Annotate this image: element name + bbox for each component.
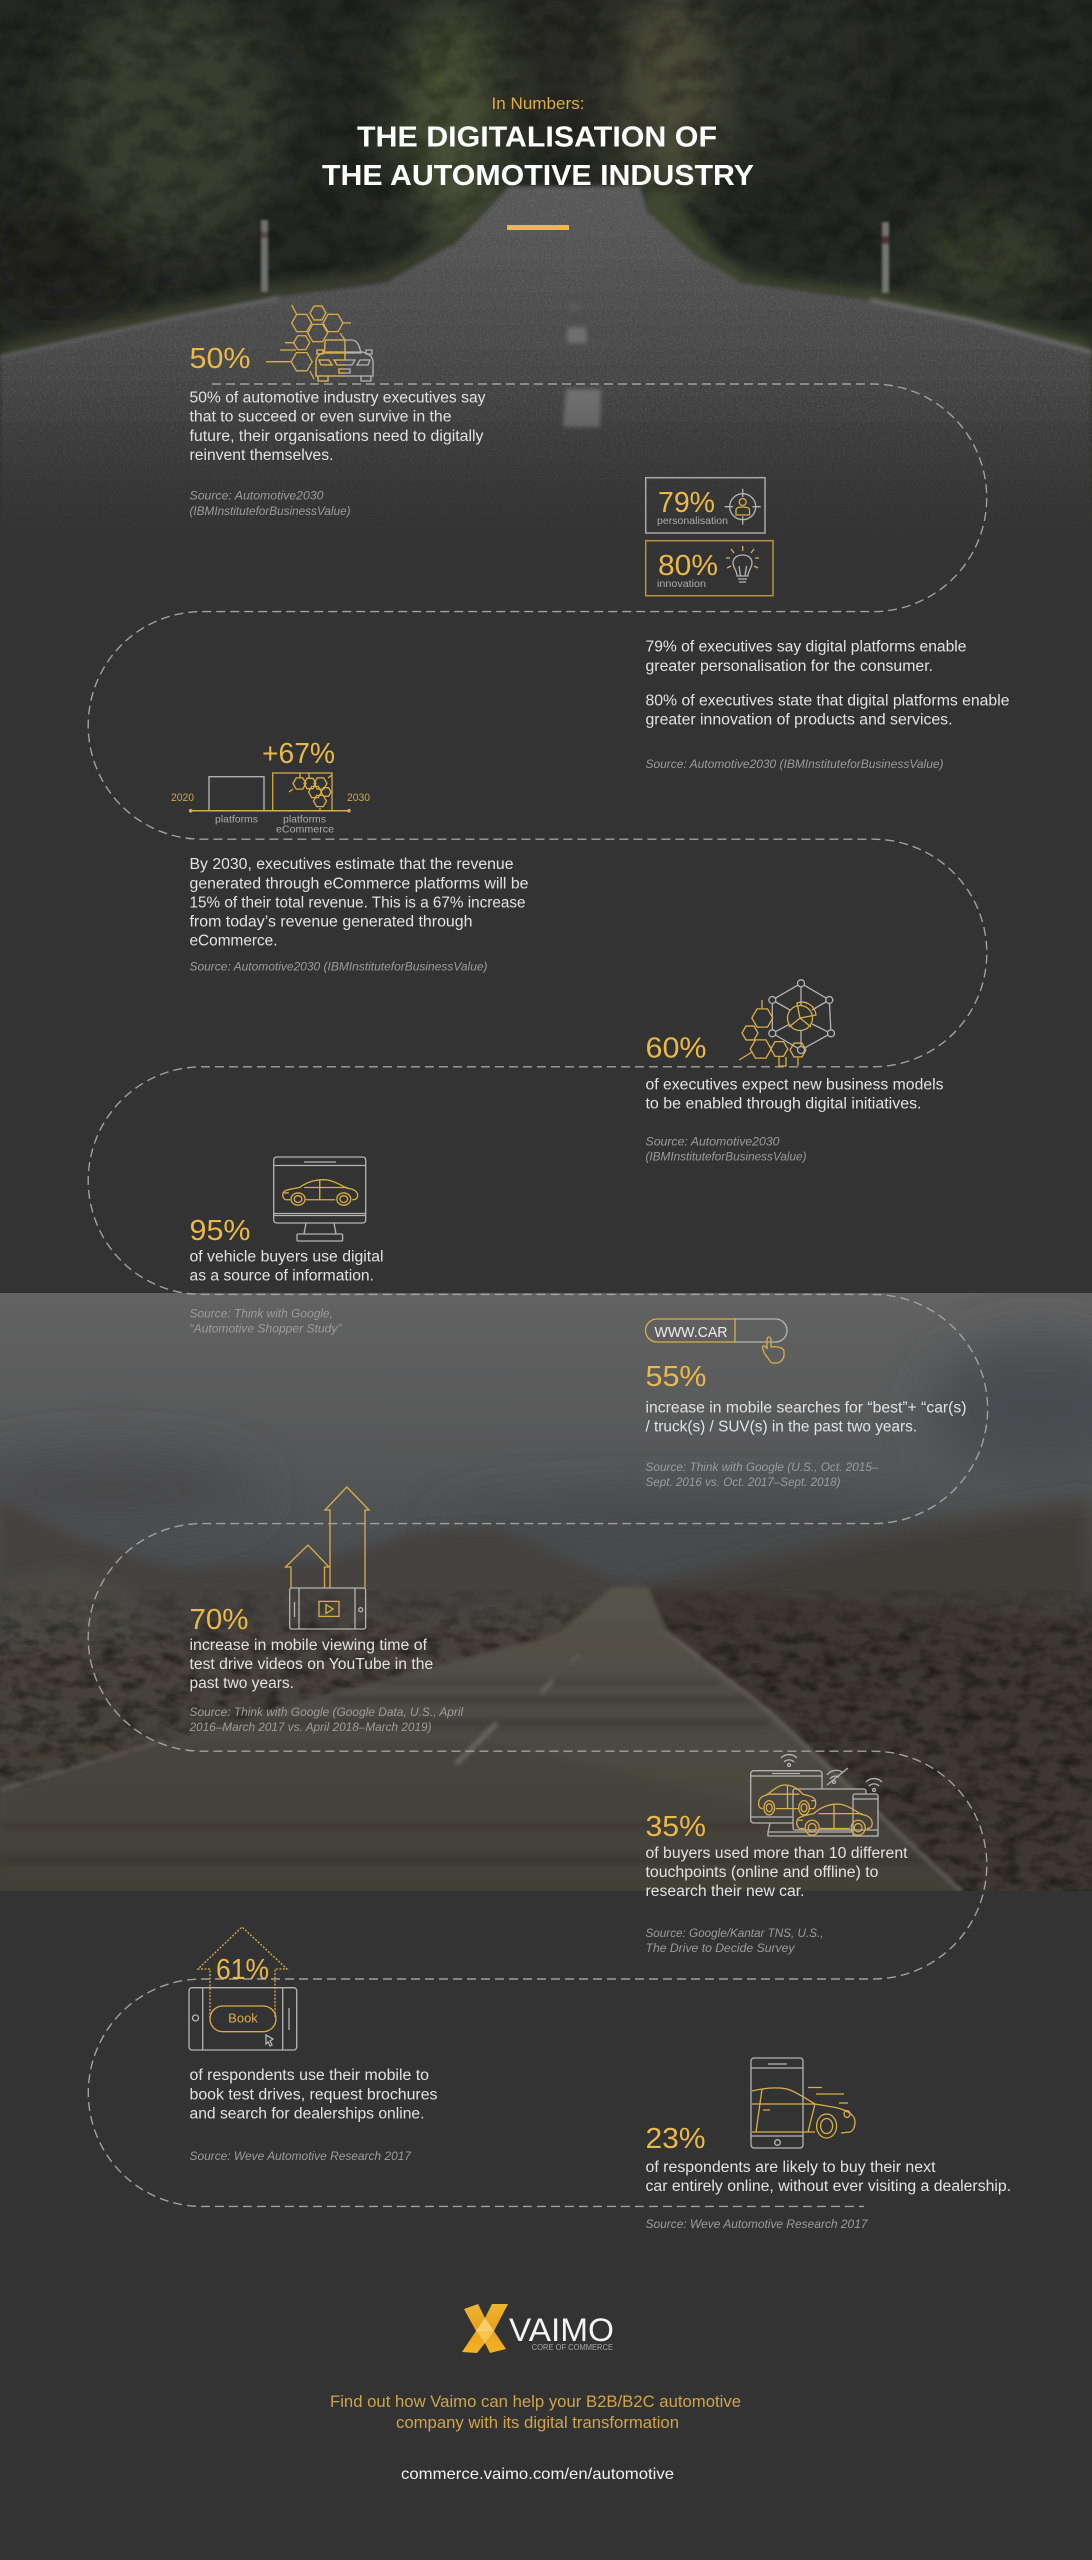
- road: [0, 1586, 950, 1891]
- source: Source: Automotive2030: [646, 1134, 780, 1148]
- background photo: mountain road: [0, 1293, 1092, 1940]
- panel: 60% new business models: [646, 980, 944, 1164]
- source: Source: Think with Google (U.S., Oct. 2015–: [646, 1460, 879, 1474]
- body text: of respondents are likely to buy their next: [646, 2159, 936, 2176]
- source: (IBMInstituteforBusinessValue): [646, 1150, 806, 1164]
- source: Source: Automotive2030 (IBMInstituteforBusinessValue): [190, 960, 488, 974]
- box: 79% personalisation: [646, 478, 765, 533]
- source: The Drive to Decide Survey: [646, 1941, 796, 1955]
- stat: 61%: 61%: [216, 1954, 269, 1986]
- body text: as a source of information.: [190, 1268, 374, 1284]
- roadside posts: [261, 220, 889, 293]
- body text: of respondents use their mobile to: [190, 2067, 429, 2084]
- panel: +67% eCommerce: [171, 738, 528, 974]
- bar chart: 2020 to 2030: 2020: [171, 792, 194, 804]
- call to action: company with its digital transformation: [396, 2414, 679, 2432]
- header: [322, 94, 754, 230]
- footer logo: Vaimo: CORE OF COMMERCE: [532, 2342, 613, 2352]
- source: “Automotive Shopper Study”: [190, 1322, 343, 1336]
- source: [646, 1926, 824, 1955]
- body text: greater innovation of products and services.: [646, 712, 952, 728]
- source: (IBMInstituteforBusinessValue): [190, 504, 350, 518]
- stat: 55%: 55%: [646, 1361, 706, 1393]
- road surface: [0, 184, 1092, 498]
- body text: [190, 856, 528, 950]
- body text: reinvent themselves.: [190, 447, 334, 464]
- stat: 60%: 60%: [646, 1032, 706, 1064]
- body text: and search for dealerships online.: [190, 2106, 424, 2122]
- body text: [190, 390, 486, 464]
- body text: of vehicle buyers use digital: [190, 1248, 384, 1266]
- road markings: [666, 1632, 961, 1891]
- body text: / truck(s) / SUV(s) in the past two years.: [646, 1418, 917, 1436]
- source: [190, 1306, 343, 1336]
- road edge lines: [0, 298, 279, 357]
- body text: greater personalisation for the consumer.: [646, 658, 933, 675]
- body text: test drive videos on YouTube in the: [190, 1656, 433, 1673]
- icon: devices with cars: [751, 1755, 882, 1836]
- panel: 23% buy online: [646, 2058, 1011, 2231]
- body text: book test drives, request brochures: [190, 2086, 438, 2104]
- dashed winding route: [88, 384, 988, 2206]
- bar chart: 2020 to 2030: eCommerce: [276, 824, 334, 836]
- bar chart: 2020 to 2030: platforms: [283, 814, 326, 826]
- website url: commerce.vaimo.com/en/automotive: [401, 2466, 674, 2483]
- icon: network and hexagons: [739, 980, 834, 1066]
- body text: research their new car.: [646, 1883, 804, 1900]
- source: [189, 1705, 464, 1734]
- source: [190, 488, 350, 518]
- body text: of buyers used more than 10 different: [646, 1845, 908, 1862]
- bar chart: 2020 to 2030: 2030: [347, 792, 370, 804]
- panel: 55% mobile searches: [646, 1319, 966, 1489]
- title: THE DIGITALISATION OF: [357, 122, 717, 154]
- stat: 95%: 95%: [190, 1215, 250, 1247]
- body text: generated through eCommerce platforms will be: [190, 876, 528, 892]
- icon: hexagons and car: [266, 305, 373, 381]
- stat: 35%: 35%: [646, 1811, 706, 1843]
- call to action: Find out how Vaimo can help your B2B/B2C automotive: [330, 2393, 741, 2411]
- icon: monitor with car: [274, 1157, 366, 1241]
- body text: [646, 638, 1010, 728]
- body text: of executives expect new business models: [646, 1076, 944, 1094]
- icon: phone with book button and dotted arrow: Book: [228, 2010, 258, 2026]
- call to action: [330, 2393, 741, 2432]
- background photo: forest road: [0, 0, 1092, 504]
- stat: +67%: +67%: [262, 738, 335, 770]
- body text: future, their organisations need to digitally: [190, 428, 484, 445]
- body text: [646, 1076, 944, 1112]
- accent bar: [507, 225, 569, 230]
- icon: rising arrows and phone: [286, 1487, 369, 1629]
- icon: search bar with hand: WWW.CAR: [654, 1324, 728, 1341]
- source: [646, 1460, 879, 1489]
- body text: [190, 1248, 384, 1284]
- footer logo: Vaimo: VAIMO: [509, 2312, 614, 2348]
- body text: 79% of executives say digital platforms enable: [646, 638, 966, 656]
- panel: 79% and 80%: [646, 478, 1010, 771]
- title: THE AUTOMOTIVE INDUSTRY: [322, 160, 754, 192]
- body text: car entirely online, without ever visiting a dealership.: [646, 2178, 1011, 2195]
- roadside verges: [0, 214, 476, 354]
- body text: [646, 2159, 1011, 2195]
- panel: 70% mobile viewing: [189, 1487, 464, 1734]
- source: Source: Automotive2030 (IBMInstituteforBusinessValue): [646, 757, 944, 771]
- bar chart: 2020 to 2030: [171, 773, 370, 836]
- body text: 50% of automotive industry executives say: [190, 390, 486, 406]
- icon: phone with book button and dotted arrow: [189, 1927, 297, 2050]
- icon: phone with car: [751, 2058, 855, 2148]
- icon: target person: [725, 489, 761, 525]
- body text: past two years.: [190, 1675, 294, 1692]
- source: Source: Weve Automotive Research 2017: [646, 2217, 869, 2231]
- box: 80% innovation: innovation: [657, 578, 706, 590]
- body text: that to succeed or even survive in the: [190, 408, 452, 426]
- icon: Vaimo X mark: [462, 2304, 508, 2353]
- source: Sept. 2016 vs. Oct. 2017–Sept. 2018): [646, 1475, 840, 1489]
- body text: [190, 1637, 433, 1692]
- body text: [646, 1400, 966, 1436]
- body text: touchpoints (online and offline) to: [646, 1864, 878, 1881]
- body text: to be enabled through digital initiatives.: [646, 1096, 922, 1112]
- stat: 70%: 70%: [190, 1604, 248, 1636]
- distant mountains: [0, 1505, 618, 1624]
- panel: 50% reinvent: [190, 305, 486, 518]
- stat: 50%: 50%: [190, 343, 250, 375]
- body text: increase in mobile searches for “best”+ “car(s): [646, 1400, 966, 1416]
- icon: search bar with hand: [646, 1319, 787, 1363]
- panel: 35% touchpoints: [646, 1755, 908, 1955]
- source: [646, 1134, 806, 1164]
- box: 79% personalisation: personalisation: [657, 515, 728, 527]
- panel: 95% vehicle buyers: [190, 1157, 384, 1336]
- body text: [646, 1845, 908, 1900]
- body text: By 2030, executives estimate that the revenue: [190, 856, 514, 873]
- body text: [190, 2067, 438, 2122]
- bar chart: 2020 to 2030: platforms: [215, 814, 258, 826]
- ground: [0, 1657, 320, 1794]
- source: Source: Think with Google (Google Data, U.S., April: [190, 1705, 464, 1719]
- title: [322, 122, 754, 192]
- footer logo: Vaimo: [462, 2304, 614, 2353]
- road centre dashes: [562, 304, 602, 429]
- source: Source: Google/Kantar TNS, U.S.,: [646, 1926, 824, 1940]
- panel: 61% mobile booking: [189, 1927, 438, 2163]
- box: 80% innovation: [646, 541, 773, 596]
- box: 80% innovation: 80%: [658, 550, 718, 582]
- body text: from today’s revenue generated through: [190, 914, 472, 930]
- subtitle: In Numbers:: [492, 94, 584, 113]
- source: Source: Think with Google,: [190, 1306, 333, 1320]
- icon: light bulb: [726, 546, 759, 582]
- stat: 23%: 23%: [646, 2123, 706, 2155]
- body text: eCommerce.: [190, 932, 278, 950]
- box: 79% personalisation: 79%: [658, 487, 715, 519]
- body text: 15% of their total revenue. This is a 67% increase: [190, 894, 526, 912]
- source: 2016–March 2017 vs. April 2018–March 2019): [189, 1720, 432, 1734]
- body text: increase in mobile viewing time of: [190, 1637, 428, 1654]
- source: Source: Automotive2030: [190, 488, 324, 502]
- source: Source: Weve Automotive Research 2017: [190, 2149, 412, 2163]
- body text: 80% of executives state that digital platforms enable: [646, 692, 1010, 710]
